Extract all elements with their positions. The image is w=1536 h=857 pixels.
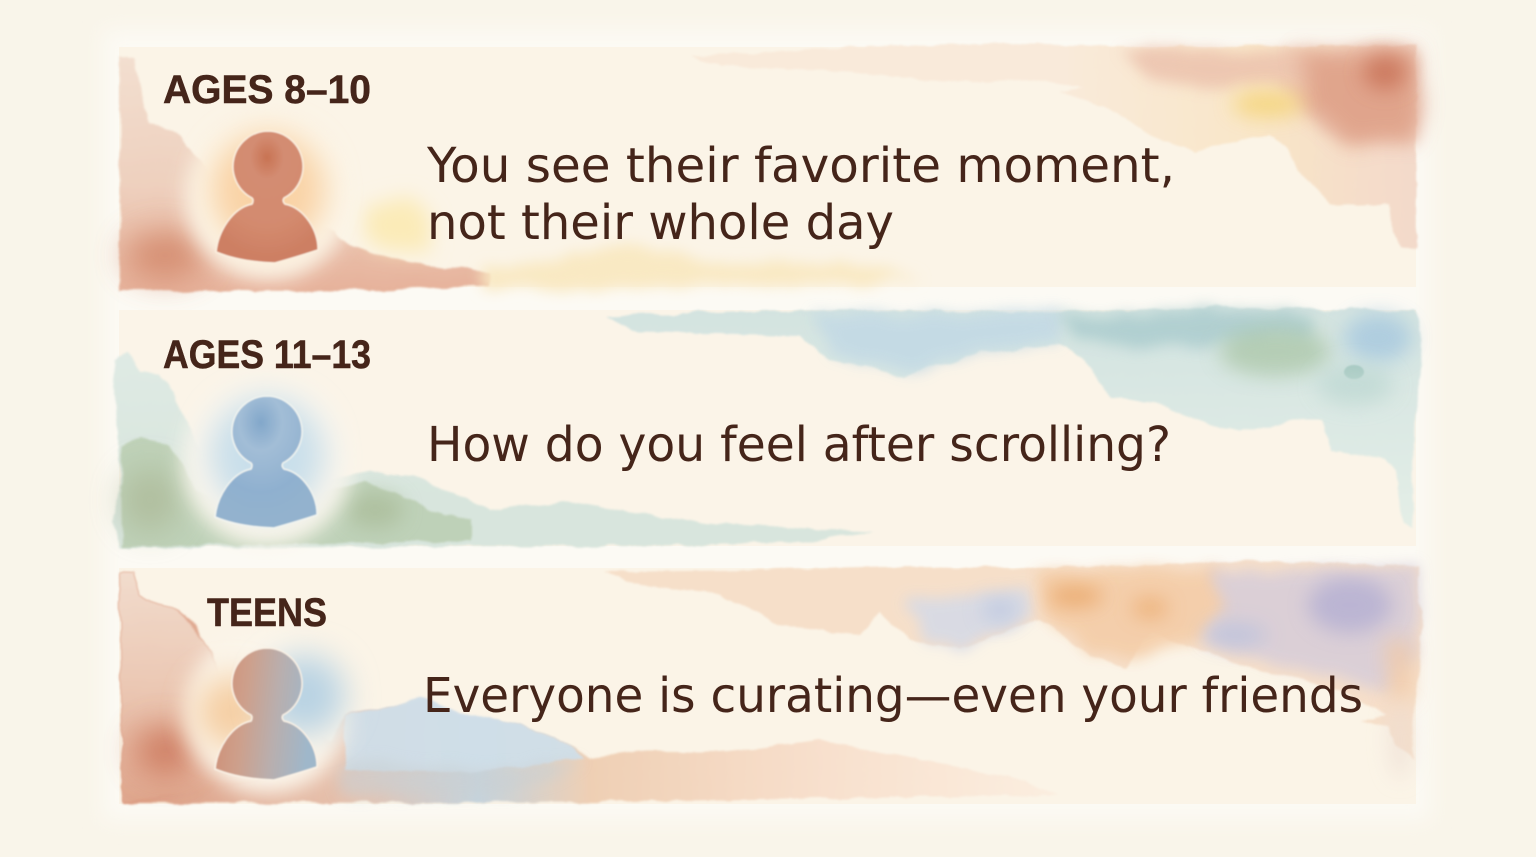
message: You see their favorite moment,: [426, 138, 1175, 194]
wash: top right cool: [605, 307, 1422, 528]
wash: top right warm: [692, 42, 1416, 248]
wash: left and bottom mixed: [120, 570, 1060, 803]
wash: left and bottom cool: [113, 352, 875, 548]
wash: left and bottom warm: [120, 56, 927, 291]
age label: AGES 11–13: [163, 333, 371, 377]
message: [426, 138, 1175, 251]
message: How do you feel after scrolling?: [427, 417, 1171, 473]
icon: orange person: [186, 116, 350, 280]
icon: mixed person: [185, 630, 349, 794]
age label: AGES 8–10: [163, 68, 371, 112]
message: Everyone is curating—even your friends: [423, 668, 1363, 724]
panel: ages 8-10: [119, 42, 1416, 291]
age label: TEENS: [207, 591, 327, 635]
paper gutter glow: [104, 30, 1430, 820]
panel: teens: [119, 561, 1422, 804]
icon: blue person: [183, 378, 351, 546]
message: not their whole day: [427, 195, 894, 251]
wash: top right mixed: [603, 561, 1422, 780]
panel: ages 11-13: [113, 307, 1422, 548]
